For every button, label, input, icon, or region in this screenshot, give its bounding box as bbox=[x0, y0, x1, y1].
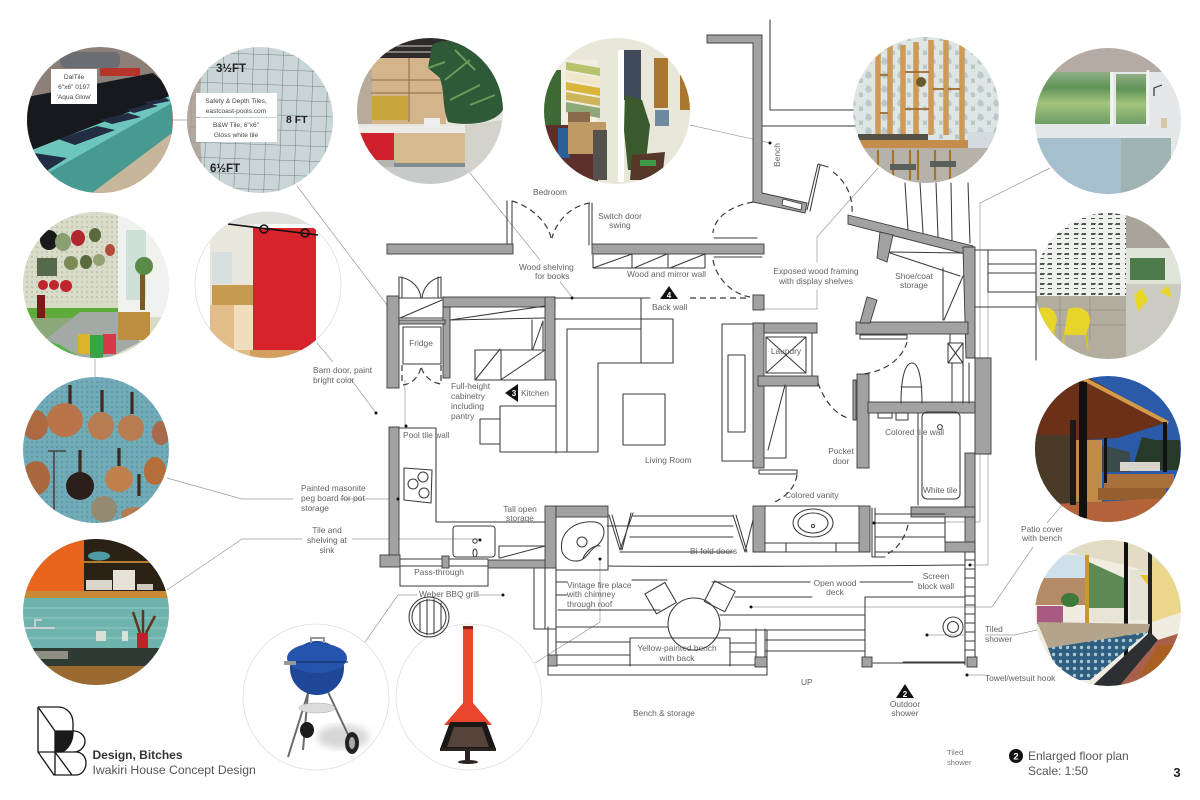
bi-fold doors bbox=[609, 513, 753, 552]
plan annotations: Bench & storage bbox=[633, 708, 695, 718]
plan annotations: Fridge bbox=[409, 338, 433, 348]
spec label: DalTile: 'Aqua Glow' bbox=[57, 94, 91, 101]
plan annotations: with back bbox=[659, 653, 695, 663]
spec label: DalTile: DalTile bbox=[64, 74, 84, 81]
plan annotations: Pass-through bbox=[414, 567, 464, 577]
icon: kitchen sink bbox=[453, 526, 495, 557]
plan annotations: sink bbox=[320, 545, 335, 555]
plan annotations: shelving at bbox=[307, 535, 348, 545]
screen block wall bbox=[903, 552, 977, 667]
fireplace bbox=[556, 517, 608, 570]
floor plan drawing bbox=[374, 20, 1036, 699]
vanity with sink bbox=[753, 506, 908, 557]
page number: 3 bbox=[1173, 765, 1181, 780]
plan annotations: cabinetry bbox=[451, 391, 486, 401]
photo: surfboard rack and hallway bbox=[543, 37, 691, 190]
photo: exposed wood framing with display shelves bbox=[853, 37, 1000, 184]
plan annotations: storage bbox=[301, 503, 329, 513]
title block bbox=[92, 748, 256, 777]
plan annotations: pantry bbox=[451, 411, 475, 421]
title block: Iwakiri House Concept Design bbox=[92, 763, 256, 777]
plan annotations: storage bbox=[900, 280, 928, 290]
plan annotations: with bench bbox=[1021, 533, 1062, 543]
spec label: depth tiles: Safety & Depth Tiles, bbox=[205, 98, 267, 105]
plan annotations: Exposed wood framing bbox=[773, 266, 859, 276]
drawing caption: enlarged floor plan: 2 bbox=[1013, 752, 1019, 762]
plan annotations: bright color bbox=[313, 375, 355, 385]
plan annotations: Open wood bbox=[814, 578, 857, 588]
leader lines bbox=[95, 120, 1062, 675]
open wood deck, table, chairs and bench bbox=[534, 516, 965, 675]
plan annotations: UP bbox=[801, 677, 813, 687]
photo: pool depth tiles with spec labels: 3½FT bbox=[216, 63, 246, 75]
plan annotations: Weber BBQ grill bbox=[419, 589, 479, 599]
lower kitchen with stove and sink bbox=[380, 427, 608, 586]
plan annotations: Vintage fire place bbox=[567, 580, 632, 590]
section marker 2: 2 bbox=[903, 690, 908, 699]
plan annotations: Back wall bbox=[652, 302, 688, 312]
section marker 3: 3 bbox=[512, 389, 517, 398]
photo: orange cabinet, shelving and aqua tile at sink bbox=[23, 539, 169, 688]
plan annotations bbox=[301, 143, 1063, 718]
plan annotations: door bbox=[833, 456, 850, 466]
drawing caption: enlarged floor plan: Enlarged floor plan bbox=[1028, 749, 1129, 763]
plan annotations: Wood shelving bbox=[519, 262, 574, 272]
plan annotations: Bi-fold doors bbox=[690, 546, 737, 556]
stray tiled shower note bbox=[947, 748, 972, 767]
plan annotations: Screen bbox=[923, 571, 950, 581]
photo: red sliding barn door bbox=[195, 212, 341, 360]
plan annotations: including bbox=[451, 401, 484, 411]
section marker 2 bbox=[896, 684, 914, 699]
plan annotations: Kitchen bbox=[521, 388, 549, 398]
plan annotations: Switch door bbox=[598, 211, 642, 221]
plan annotations: Shoe/coat bbox=[895, 271, 934, 281]
spec label: depth tiles: Gloss white tile bbox=[214, 132, 259, 139]
bathroom, laundry and storage bbox=[722, 215, 991, 552]
spec label: depth tiles: eastcoast-pools.com bbox=[206, 108, 267, 115]
plan annotations: for books bbox=[535, 271, 569, 281]
icon: BBQ grill in plan bbox=[409, 597, 449, 637]
spec label: depth tiles: B&W Tile, 6"x6" bbox=[213, 122, 260, 129]
stray tiled shower note: Tiled bbox=[947, 748, 963, 757]
plan annotations: block wall bbox=[918, 581, 954, 591]
plan annotations: White tile bbox=[923, 485, 958, 495]
plan annotations: with chimney bbox=[566, 589, 616, 599]
bench alcove bbox=[707, 20, 1036, 360]
spec label: DalTile bbox=[51, 69, 97, 104]
plan annotations: shower bbox=[892, 708, 919, 718]
plan annotations: Living Room bbox=[645, 455, 692, 465]
photo: pool depth tiles with spec labels bbox=[187, 47, 333, 193]
plan annotations: Bedroom bbox=[533, 187, 567, 197]
plan annotations: Tile and bbox=[312, 525, 342, 535]
photo: aqua tile bench with spec label bbox=[27, 47, 173, 195]
plan annotations: Bench bbox=[772, 143, 782, 167]
photo: window with frosted green view bbox=[1035, 48, 1183, 198]
drawing caption: enlarged floor plan bbox=[1009, 749, 1129, 778]
plan annotations: Full-height bbox=[451, 381, 491, 391]
icon: outdoor shower head bbox=[943, 617, 963, 637]
plan annotations: peg board for pot bbox=[301, 493, 365, 503]
photo: plywood kitchen shelving and counter bbox=[356, 38, 505, 187]
drawing caption: enlarged floor plan: Scale: 1:50 bbox=[1028, 764, 1088, 778]
plan annotations: deck bbox=[826, 587, 845, 597]
photo: copper pans on blue pegboard bbox=[22, 377, 170, 525]
plan annotations: storage bbox=[506, 513, 534, 523]
plan annotations: Barn door, paint bbox=[313, 365, 373, 375]
plan annotations: Wood and mirror wall bbox=[627, 269, 706, 279]
plan annotations: swing bbox=[609, 220, 631, 230]
spec label: DalTile: 6"x6" 0197 bbox=[58, 84, 90, 91]
section marker 3 bbox=[505, 384, 518, 402]
logo: Design, Bitches monogram bbox=[38, 707, 86, 775]
plan annotations: Pocket bbox=[828, 446, 854, 456]
title block: Design, Bitches bbox=[92, 748, 183, 762]
back wall line with section marker 4 bbox=[660, 286, 750, 300]
photo: timber patio cover with bench bbox=[1035, 376, 1183, 524]
plan annotations: Yellow-painted bench bbox=[637, 643, 717, 653]
annotation dots bbox=[374, 142, 972, 676]
plan annotations: Patio cover bbox=[1021, 524, 1063, 534]
photo: pegboard kitchen with pots bbox=[23, 212, 170, 360]
plan annotations: shower bbox=[985, 634, 1012, 644]
photo: pool depth tiles with spec labels: 6½FT bbox=[210, 163, 240, 175]
plan annotations: Tiled bbox=[985, 624, 1003, 634]
upper bedroom wall and doors bbox=[387, 201, 764, 268]
kitchen walls and cabinetry bbox=[387, 277, 673, 453]
plan annotations: Colored vanity bbox=[785, 490, 839, 500]
photo: tiled outdoor shower area bbox=[1035, 540, 1183, 688]
plan annotations: through roof bbox=[567, 599, 613, 609]
photo: pool depth tiles with spec labels: 8 FT bbox=[286, 114, 308, 126]
plan annotations: with display shelves bbox=[778, 276, 853, 286]
back wall line with section marker 4: 4 bbox=[667, 291, 672, 300]
icon: stove bbox=[404, 468, 432, 503]
plan annotations: Tall open bbox=[503, 504, 537, 514]
plan annotations: Painted masonite bbox=[301, 483, 366, 493]
plan annotations: Outdoor bbox=[890, 699, 920, 709]
plan annotations: Colored tile wall bbox=[885, 427, 944, 437]
spec label: depth tiles bbox=[196, 93, 277, 142]
stray tiled shower note: shower bbox=[947, 758, 972, 767]
photo: blue Weber kettle grill bbox=[243, 624, 389, 770]
plan annotations: Pool tile wall bbox=[403, 430, 450, 440]
plan annotations: Towel/wetsuit hook bbox=[985, 673, 1056, 683]
photo: breeze block screen wall with yellow chairs bbox=[1035, 212, 1185, 362]
plan annotations: Laundry bbox=[771, 346, 802, 356]
photo: red hanging Malm fireplace bbox=[396, 624, 542, 770]
